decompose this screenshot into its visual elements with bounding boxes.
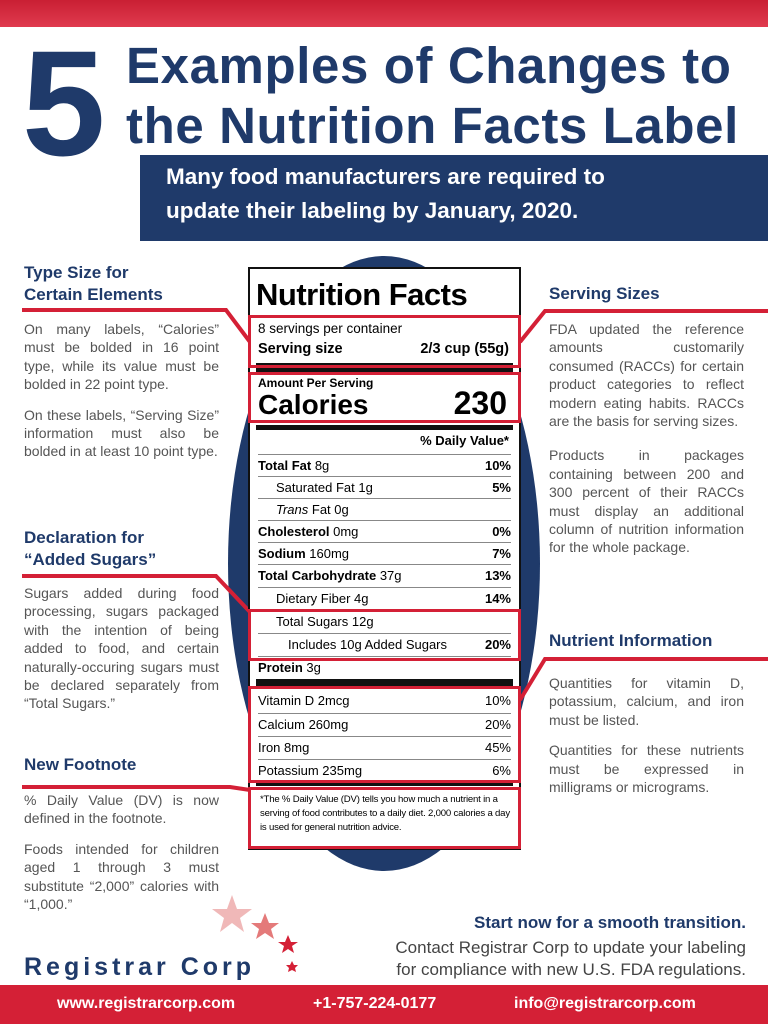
nutrition facts label: Total Carbohydrate 37g [258,568,402,583]
panel: footnote [24,755,219,912]
call to action: Contact Registrar Corp to update your labeling [395,938,746,957]
panel: nutrient information: Quantities for vitamin D, potassium, calcium, and iron must be listed. [549,675,744,728]
nutrition facts label: 2/3 cup (55g) [420,341,509,357]
title [126,37,739,154]
nutrition facts label: Calories [258,389,368,420]
nutrition facts label: 8 servings per container [258,321,402,336]
panel: nutrient information [549,631,744,795]
panel: added sugars: “Added Sugars” [24,550,156,569]
nutrition facts label: Total Sugars 12g [276,614,374,629]
nutrition facts label: Saturated Fat 1g [276,480,373,495]
panel: type size: On many labels, “Calories” must be bolded in 16 point type, while its value must be bolded in 22 point type. [24,321,219,392]
panel: nutrient information: Nutrient Information [549,631,712,650]
panel: type size: On these labels, “Serving Size” information must also be bolded in at least 10 point type. [24,407,219,459]
panel: nutrient information: Quantities for these nutrients must be expressed in milligrams or micrograms. [549,742,744,795]
nutrition facts label: 45% [485,740,511,755]
panel: serving sizes: FDA updated the reference amounts customarily consumed (RACCs) for certain product categories to reflect modern eating habits. RACCs are the basis for serving sizes. [549,321,744,429]
title: the Nutrition Facts Label [126,97,739,154]
call to action: for compliance with new U.S. FDA regulations. [396,960,746,979]
nutrition facts label: 10% [485,693,511,708]
nutrition facts label: 5% [492,480,511,495]
panel: footnote: New Footnote [24,755,136,774]
footer bar: www.registrarcorp.com [57,995,235,1012]
subtitle banner: Many food manufacturers are required to [166,164,605,189]
nutrition facts label: 20% [485,717,511,732]
nutrition facts label: 6% [492,763,511,778]
nutrition facts label: Total Fat 8g [258,458,329,473]
footer bar: +1-757-224-0177 [313,995,436,1012]
nutrition facts label: Calcium 260mg [258,717,348,732]
panel: type size [24,263,219,459]
nutrition facts label: Sodium 160mg [258,546,349,561]
nutrition facts label: *The % Daily Value (DV) tells you how much a nutrient in a serving of food contributes to a daily diet. 2,000 calories a day is used for general nutrition advice. [260,794,510,833]
footer bar: info@registrarcorp.com [514,995,696,1012]
nutrition facts label: % Daily Value* [420,433,509,448]
nutrition facts label: Dietary Fiber 4g [276,591,368,606]
panel: serving sizes: Serving Sizes [549,284,660,303]
nutrition facts label: Potassium 235mg [258,763,362,778]
panel: added sugars [24,528,219,711]
nutrition facts label: 10% [485,458,511,473]
nutrition facts label: Vitamin D 2mcg [258,693,350,708]
panel: footnote: % Daily Value (DV) is now defined in the footnote. [24,792,219,826]
panel: type size: Certain Elements [24,285,163,304]
nutrition facts label: 13% [485,568,511,583]
panel: added sugars: Sugars added during food processing, sugars packaged with the intention of being added to food, and certain naturally-occuring sugars must be declared separately from “Total Sugars.” [24,585,219,711]
big number 5: 5 [22,19,101,187]
panel: added sugars: Declaration for [24,528,144,547]
title: Examples of Changes to [126,37,732,94]
nutrition facts label: 230 [454,385,507,421]
nutrition facts label: Serving size [258,341,343,357]
nutrition facts label: 14% [485,591,511,606]
panel: serving sizes [549,284,744,555]
panel: type size: Type Size for [24,263,129,282]
nutrition facts label [248,267,521,850]
nutrition facts label: 20% [485,637,511,652]
nutrition facts label: Includes 10g Added Sugars [288,637,447,652]
nutrition facts label: Trans Fat 0g [276,502,349,517]
nutrition facts label: Iron 8mg [258,740,309,755]
call to action: Start now for a smooth transition. [474,913,746,932]
panel: footnote: Foods intended for children aged 1 through 3 must substitute “2,000” calories with “1,000.” [24,841,219,912]
nutrition facts label: 0% [492,524,511,539]
panel: serving sizes: Products in packages containing between 200 and 300 percent of their RACCs must display an additional column of nutrition information for the whole package. [549,447,744,555]
nutrition facts label: Nutrition Facts [256,277,467,312]
nutrition facts label: Protein 3g [258,660,321,675]
highlight boxes [248,315,521,368]
footer bar [0,985,768,1024]
icon: stars [212,895,298,972]
nutrition facts label: 7% [492,546,511,561]
nutrition facts label: Cholesterol 0mg [258,524,358,539]
call to action [395,913,746,979]
top red bar [0,0,768,27]
navy oval backdrop [228,256,540,871]
logo: Registrar Corp [24,953,255,981]
subtitle banner [140,155,768,241]
subtitle banner: update their labeling by January, 2020. [166,198,578,223]
nutrition facts label: Amount Per Serving [258,376,373,390]
